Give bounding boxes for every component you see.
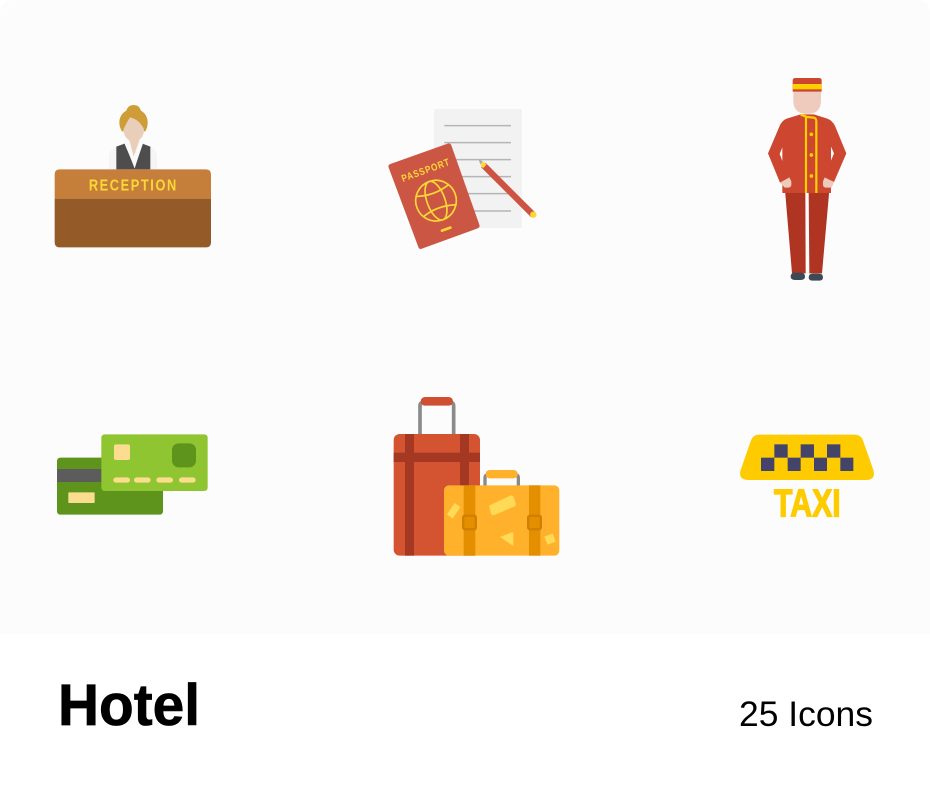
desk label: RECEPTION: [89, 177, 178, 195]
jacket trim and buttons: [801, 115, 816, 193]
icon: passport and document: [388, 109, 536, 249]
jacket: [768, 114, 846, 193]
pen: [479, 160, 536, 218]
icon: bellhop: [768, 78, 846, 281]
document: [434, 109, 522, 228]
back card: [57, 458, 163, 515]
desk top band: [55, 169, 211, 199]
icon: reception desk: [55, 105, 211, 247]
title: Hotel: [58, 673, 200, 738]
hands: [780, 177, 834, 188]
large suitcase: [394, 434, 480, 556]
icon: credit cards: [57, 434, 208, 515]
large suitcase handle: [420, 397, 454, 435]
front card: [101, 434, 208, 491]
cap: [793, 78, 822, 92]
passport: PASSPORT: [400, 156, 452, 184]
small suitcase handle: [485, 470, 518, 487]
small suitcase: [444, 485, 559, 556]
shoes: [791, 273, 823, 281]
icon: taxi sign: [740, 435, 874, 525]
arm gaps: [780, 147, 834, 161]
checker pattern: [761, 444, 853, 471]
passport: [388, 143, 480, 249]
legs: [785, 190, 829, 273]
roof sign: [740, 435, 874, 480]
receptionist: [109, 105, 157, 169]
desk front: [55, 199, 211, 247]
head: [793, 91, 821, 114]
icon: luggage: [394, 397, 559, 556]
icon count: 25 Icons: [739, 695, 873, 734]
taxi label: TAXI: [774, 482, 841, 525]
